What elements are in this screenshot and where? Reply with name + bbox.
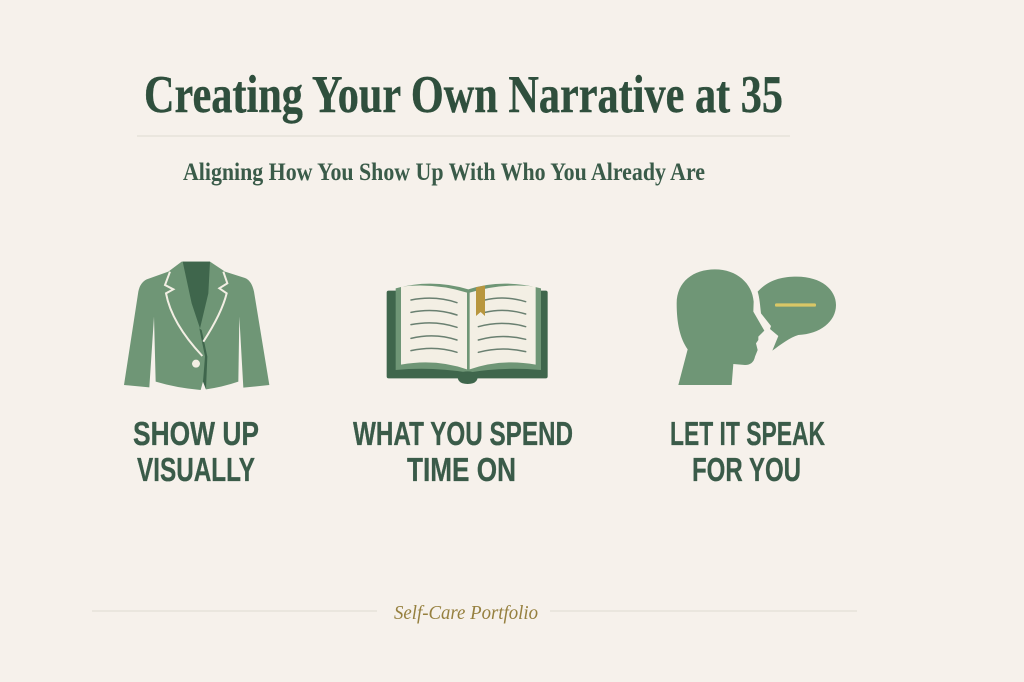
label: show up visually: SHOW UP [133,415,259,452]
icon: head with speech bubble [677,269,836,385]
label: let it speak for you [670,415,825,488]
label: what you spend time on: TIME ON [407,451,516,488]
footer: Self-Care Portfolio [394,602,538,624]
subtitle: Aligning How You Show Up With Who You Already Are [183,159,705,186]
label: show up visually: VISUALLY [137,451,255,488]
label: what you spend time on [353,415,573,488]
label: what you spend time on: WHAT YOU SPEND [353,415,573,452]
icon: blazer [124,262,269,390]
label: let it speak for you: LET IT SPEAK [670,415,825,452]
label: show up visually [133,415,259,488]
label: let it speak for you: FOR YOU [692,451,801,488]
title: Creating Your Own Narrative at 35 [144,66,783,124]
bookmark [476,285,485,316]
icon: open book [387,284,548,384]
